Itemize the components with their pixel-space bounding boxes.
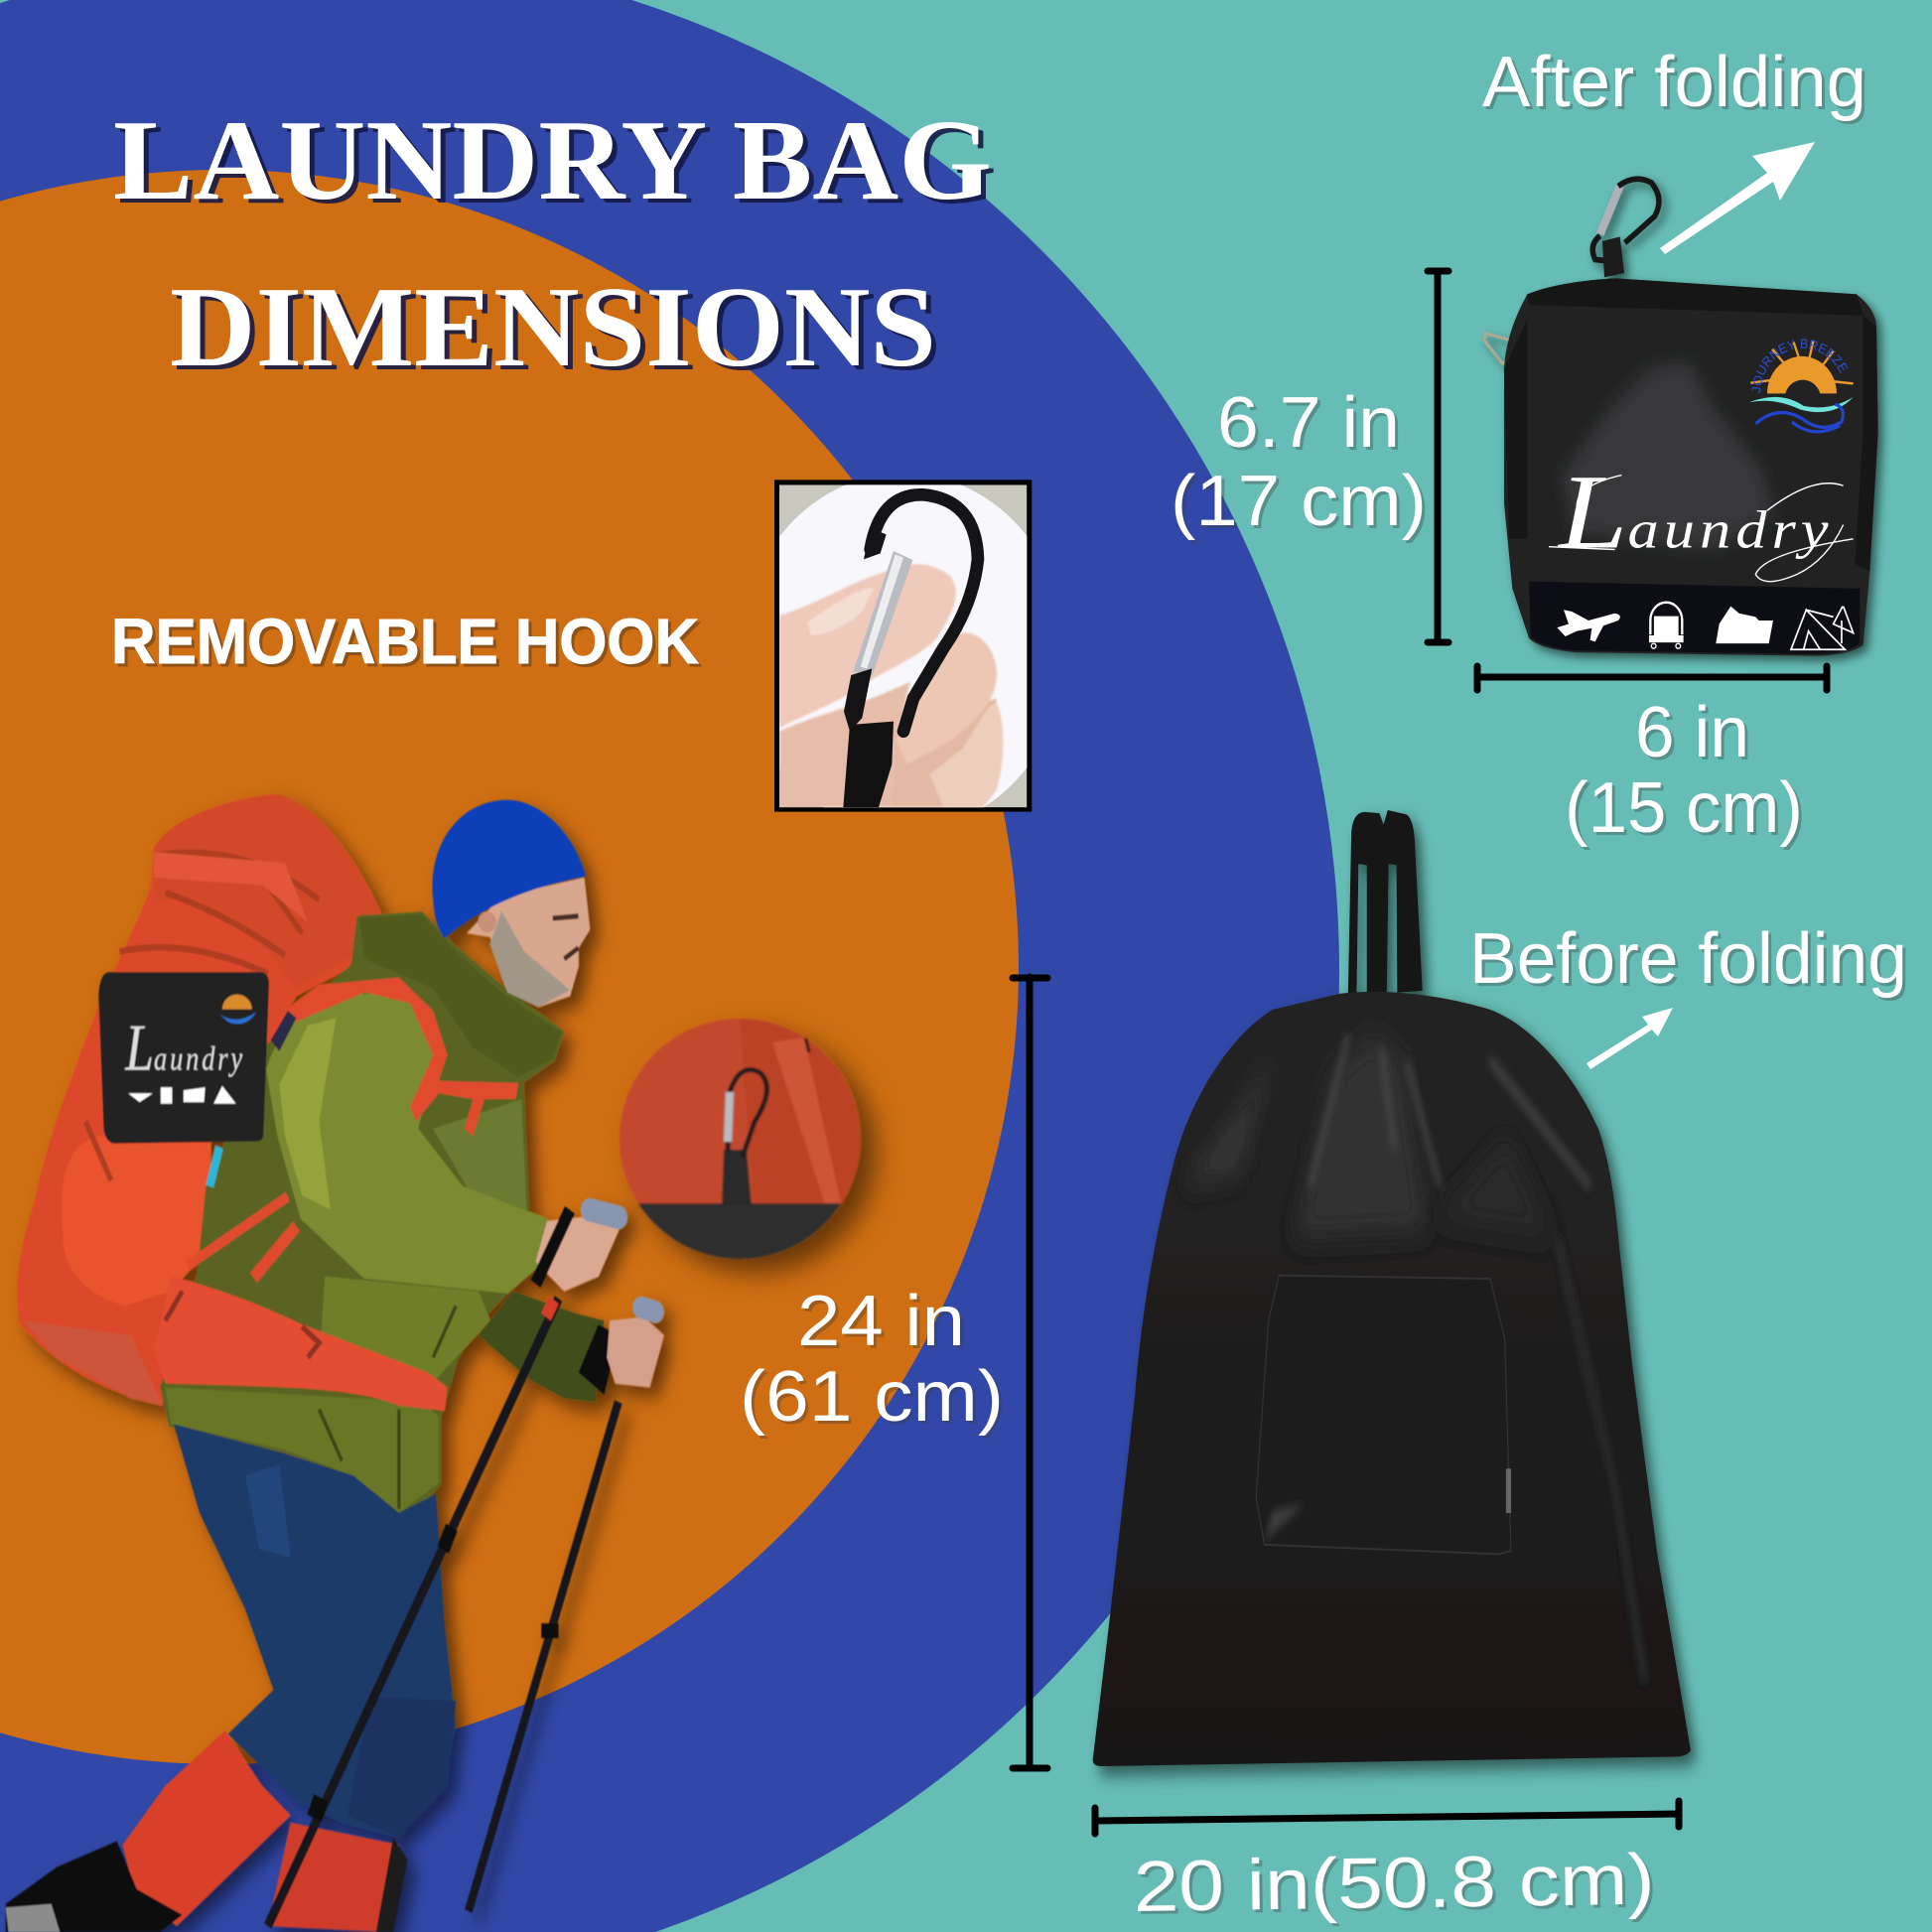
photo: hook held in fingers xyxy=(774,480,1033,812)
front boot xyxy=(6,1842,183,1932)
pouch width inches: 6 in xyxy=(1635,693,1749,772)
icon: cruise ship xyxy=(1716,607,1773,643)
straps xyxy=(188,977,518,1278)
water tube xyxy=(209,1148,219,1186)
title xyxy=(113,97,992,391)
near hand and grip xyxy=(536,1210,621,1292)
bag body xyxy=(1093,992,1691,1766)
dimension line: bag height xyxy=(1013,977,1047,1768)
jacket xyxy=(163,914,604,1513)
cord ends xyxy=(1358,994,1398,1013)
hip belt xyxy=(154,1277,448,1411)
background circle: blue xyxy=(0,0,1339,1932)
jacket sleeve xyxy=(268,996,547,1292)
pouch width centimetres: (15 cm) xyxy=(1565,768,1803,848)
title line 1: LAUNDRY BAG xyxy=(113,97,992,224)
fabric sheen xyxy=(1562,361,1774,550)
zipper pull xyxy=(1484,334,1511,363)
arrow: before folding xyxy=(1587,1008,1673,1069)
pouch height centimetres: (17 cm) xyxy=(1171,462,1427,541)
icon: plane xyxy=(1557,610,1620,641)
trousers xyxy=(174,1424,456,1838)
background circle: orange xyxy=(0,170,1019,1764)
pouch edge bands xyxy=(1504,278,1878,571)
script wordmark: Laundry xyxy=(1557,454,1834,572)
dimension line: pouch height xyxy=(1428,271,1449,642)
front gaiter xyxy=(122,1730,291,1926)
dimension line: pouch width xyxy=(1477,666,1827,690)
brand logo xyxy=(1749,340,1854,433)
heading: removable hook: REMOVABLE HOOK xyxy=(111,606,699,677)
callout circle: hook on backpack xyxy=(620,1019,874,1273)
far pole xyxy=(469,1402,619,1911)
hat xyxy=(433,800,586,938)
pouch height inches: 6.7 in xyxy=(1217,383,1400,463)
carabiner xyxy=(1592,179,1659,260)
gathered top highlights xyxy=(1180,1035,1645,1681)
icon: luggage cart xyxy=(1649,603,1684,648)
arrow: after folding xyxy=(1660,142,1815,254)
pouch wordmark: Laundry xyxy=(124,1011,245,1084)
laundry bag unfolded xyxy=(1093,810,1691,1766)
face xyxy=(468,878,590,1007)
near pole xyxy=(268,1299,559,1926)
label: 20 in: 20 in(50.8 cm) xyxy=(1133,1841,1655,1927)
folded pocket xyxy=(1256,1276,1511,1554)
height centimetres: (61 cm) xyxy=(740,1357,1004,1437)
hiker illustration xyxy=(6,794,664,1932)
folded pouch xyxy=(1482,175,1889,667)
height inches: 24 in xyxy=(797,1282,965,1361)
script flourish xyxy=(1549,476,1854,582)
icon: tent and trees xyxy=(1791,607,1854,649)
label: before folding: Before folding xyxy=(1469,919,1907,999)
pouch on backpack xyxy=(98,972,269,1144)
beard xyxy=(490,911,570,1007)
label: 6.7 in xyxy=(1171,383,1427,541)
label: after folding: After folding xyxy=(1482,43,1866,122)
far hand and grip xyxy=(579,1308,664,1395)
fabric dark base xyxy=(1529,582,1860,654)
rear boot strap xyxy=(376,1838,407,1932)
snow on boot xyxy=(6,1904,60,1932)
pouch body xyxy=(1504,278,1878,656)
sleeve highlight xyxy=(279,1018,337,1210)
label: 24 in xyxy=(740,1282,1004,1437)
title line 2: DIMENSIONS xyxy=(170,264,936,391)
pouch loop xyxy=(1602,237,1624,277)
rear gaiter xyxy=(268,1823,399,1932)
logo wordmark: JOURNEY BREEZE xyxy=(1751,340,1849,393)
backpack xyxy=(17,794,382,1406)
label: 6 in xyxy=(1565,693,1803,848)
dimension line: bag width xyxy=(1095,1801,1679,1834)
drawstring handle xyxy=(1348,810,1423,1010)
